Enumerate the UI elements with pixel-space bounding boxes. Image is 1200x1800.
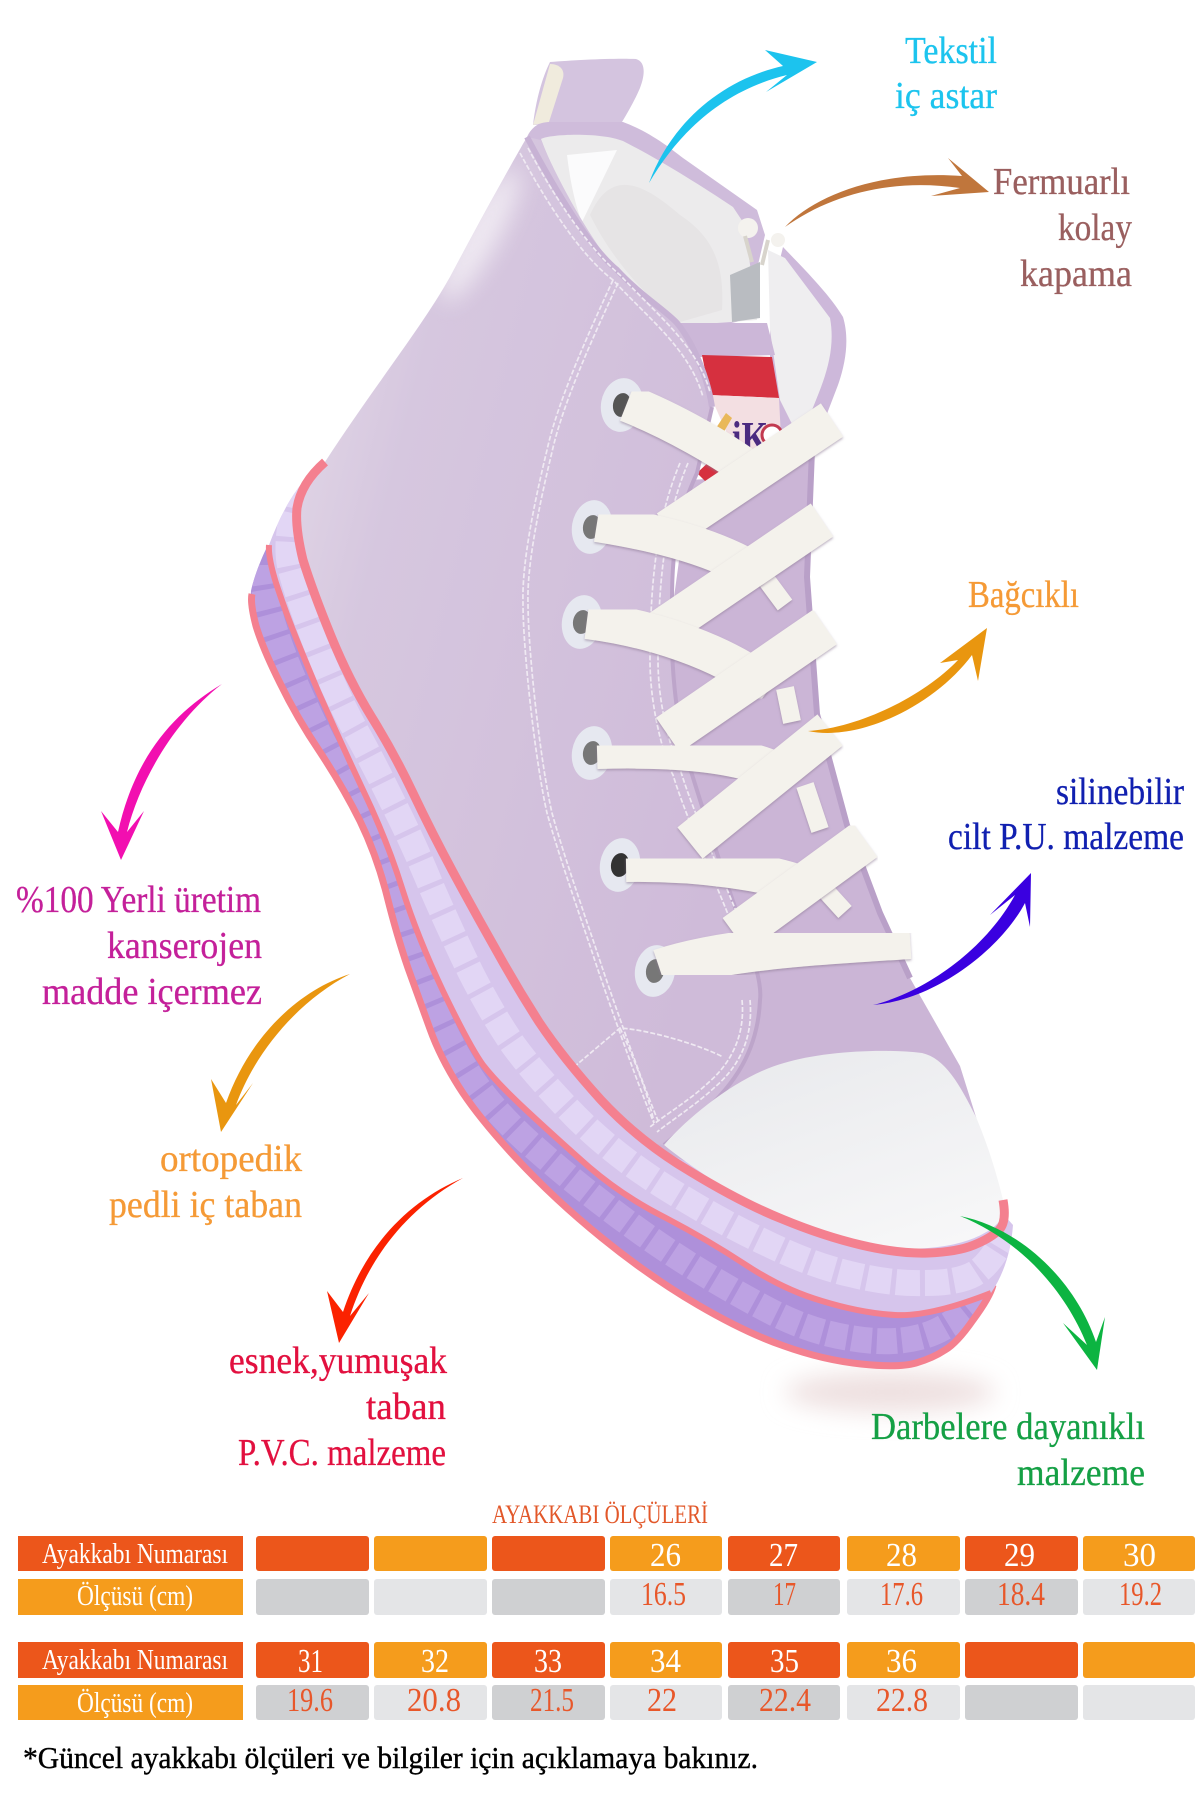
arrow: orthopedic insole (orange) xyxy=(211,974,350,1132)
label: Darbelere dayanıklı malzeme: Darbelere dayanıklı xyxy=(871,1406,1145,1448)
label: esnek yumuşak taban: P.V.C. malzeme xyxy=(238,1432,446,1474)
row labels: Ölçüsü (cm) xyxy=(77,1581,193,1612)
size table xyxy=(18,1536,1195,1720)
lace segment 4 xyxy=(597,750,785,775)
label: esnek yumuşak taban: taban xyxy=(366,1386,446,1428)
label: ortopedik pedli iç taban: pedli iç taban xyxy=(109,1184,302,1226)
logo text: iK xyxy=(732,413,768,462)
label: %100 Yerli üretim: madde içermez xyxy=(42,971,262,1013)
label: silinebilir cilt P.U. malzeme: silinebilir xyxy=(1056,771,1184,813)
row 3 cells xyxy=(256,1642,1195,1680)
logo face xyxy=(762,425,782,445)
row 1 cells: 27 xyxy=(769,1537,798,1574)
laces xyxy=(587,403,910,970)
row 4 cells xyxy=(256,1682,1195,1720)
lace crossing 4 xyxy=(690,730,830,843)
vamp behind laces xyxy=(640,440,1000,1210)
label: %100 Yerli üretim: kanserojen xyxy=(107,925,262,967)
row labels: Ölçüsü (cm) xyxy=(77,1688,193,1719)
inner lining xyxy=(541,135,757,326)
dark sole section xyxy=(251,547,993,1366)
shoe shadow xyxy=(785,1372,995,1412)
label: %100 Yerli üretim xyxy=(16,879,262,1013)
row labels xyxy=(18,1536,243,1720)
label: silinebilir cilt P.U. malzeme xyxy=(948,771,1184,858)
zipper xyxy=(730,218,785,322)
upper body panel xyxy=(299,137,760,1145)
lace segment 3 xyxy=(587,620,770,688)
row 2 cells xyxy=(256,1576,1195,1615)
row 3 cells: 35 xyxy=(770,1643,799,1680)
eyelets xyxy=(558,375,679,1000)
row labels: Ayakkabı Numarası xyxy=(42,1645,228,1676)
label: Fermuarlı kolay kapama xyxy=(993,161,1132,295)
row 4 cells: 20.8 xyxy=(407,1682,461,1719)
lace segment 2 xyxy=(597,523,765,578)
row 4 cells: 22 xyxy=(647,1682,677,1719)
arrow: laces (orange) xyxy=(808,628,987,733)
right side strip xyxy=(807,450,910,978)
label: Tekstil iç astar: iç astar xyxy=(895,75,997,117)
row 2 cells: 17.6 xyxy=(880,1576,923,1613)
row 4 cells: 19.6 xyxy=(287,1682,333,1719)
arrow: local production (magenta) xyxy=(101,684,222,860)
stitching xyxy=(520,148,753,1132)
row 3 cells: 33 xyxy=(534,1643,562,1680)
label: ortopedik pedli iç taban xyxy=(109,1138,302,1226)
label: Bağcıklı: Bağcıklı xyxy=(968,574,1079,616)
arrow: durable toe (green) xyxy=(960,1216,1105,1370)
label: ortopedik pedli iç taban: ortopedik xyxy=(160,1138,302,1180)
arrow: PU material (blue) xyxy=(873,873,1031,1005)
label: Darbelere dayanıklı malzeme xyxy=(871,1406,1145,1494)
row 1 cells: 29 xyxy=(1004,1537,1035,1574)
arrow: textile lining (cyan) xyxy=(649,50,817,183)
toe cap xyxy=(664,1051,1006,1249)
label: esnek yumuşak taban xyxy=(229,1340,447,1474)
row labels: Ayakkabı Numarası xyxy=(42,1539,228,1570)
shoe xyxy=(251,59,1013,1412)
lace crossing 1 xyxy=(668,420,832,530)
row 3 cells: 32 xyxy=(421,1643,449,1680)
label: Darbelere dayanıklı malzeme: malzeme xyxy=(1017,1452,1145,1494)
collar back rim xyxy=(527,122,765,335)
row 2 cells: 19.2 xyxy=(1119,1576,1162,1613)
row 1 cells: 30 xyxy=(1123,1537,1156,1574)
label: Tekstil iç astar xyxy=(895,30,997,117)
upper pink band xyxy=(297,462,1004,1253)
arrow: flexible sole (red) xyxy=(327,1178,463,1343)
row 2 cells: 18.4 xyxy=(997,1576,1045,1613)
light midsole xyxy=(269,462,1013,1315)
lace crossing 3 xyxy=(668,627,825,735)
row 2 cells: 16.5 xyxy=(641,1576,686,1613)
size table title: AYAKKABI ÖLÇÜLERİ xyxy=(492,1500,708,1529)
pull tab xyxy=(533,59,644,125)
label: Fermuarlı kolay kapama: Fermuarlı xyxy=(993,161,1130,203)
row 4 cells: 21.5 xyxy=(530,1682,574,1719)
label: %100 Yerli üretim: %100 Yerli üretim xyxy=(16,879,261,921)
collar edge xyxy=(527,137,712,407)
row 4 cells: 22.4 xyxy=(759,1682,811,1719)
arrow: zipper (brown) xyxy=(785,158,989,227)
row 3 cells: 31 xyxy=(298,1643,323,1680)
lace segment 1 xyxy=(627,403,760,478)
row 4 cells: 22.8 xyxy=(876,1682,928,1719)
tongue with label xyxy=(677,323,782,494)
label: Fermuarlı kolay kapama: kapama xyxy=(1020,253,1132,295)
lace segment 6 xyxy=(660,938,910,970)
row 1 cells: 28 xyxy=(886,1537,917,1574)
lace tail pieces xyxy=(765,578,845,912)
row 2 cells: 17 xyxy=(773,1576,796,1613)
right collar and lining xyxy=(768,247,846,445)
lace segment 5 xyxy=(626,863,815,890)
body highlight xyxy=(439,167,526,304)
row 1 cells: 26 xyxy=(650,1537,681,1574)
label: Tekstil iç astar: Tekstil xyxy=(905,30,997,72)
lace crossing 2 xyxy=(660,520,822,630)
row 3 cells: 34 xyxy=(650,1643,681,1680)
footnote: *Güncel ayakkabı ölçüleri ve bilgiler için açıklamaya bakınız. xyxy=(23,1740,758,1775)
label: esnek yumuşak taban: esnek,yumuşak xyxy=(229,1340,447,1382)
lace crossing 5 xyxy=(735,840,865,935)
row 1 cells xyxy=(256,1536,1195,1574)
label: Fermuarlı kolay kapama: kolay xyxy=(1058,207,1132,249)
row 3 cells: 36 xyxy=(886,1643,917,1680)
flap edge xyxy=(664,407,760,1145)
logo diamond xyxy=(716,413,732,435)
